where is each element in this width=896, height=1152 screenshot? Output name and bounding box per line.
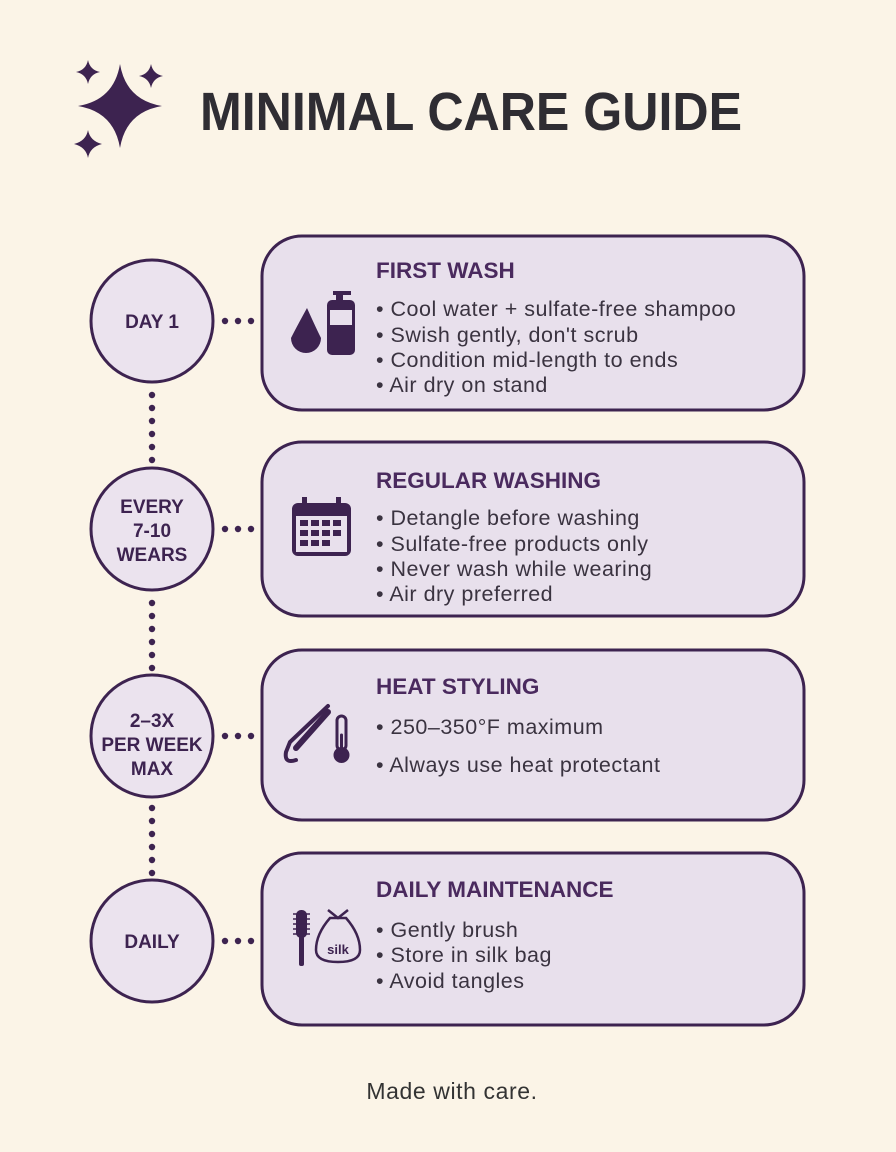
circle: every 7-10 wears: EVERY xyxy=(120,497,184,518)
circle: 2-3x per week xyxy=(91,675,213,797)
circle: 2-3x per week: 2–3X xyxy=(130,711,175,732)
panel: first wash: • Air dry on stand xyxy=(376,373,548,397)
footer: Made with care. xyxy=(366,1078,538,1104)
icon: brush and silk bag: silk xyxy=(327,942,350,957)
panel: regular washing: REGULAR WASHING xyxy=(376,468,601,493)
icon: drop and bottle xyxy=(291,291,355,355)
panel: first wash: FIRST WASH xyxy=(376,258,515,283)
panel: daily maintenance xyxy=(262,853,804,1025)
panel: heat styling: HEAT STYLING xyxy=(376,674,539,699)
icon: flat iron and thermometer xyxy=(286,706,348,762)
panel: regular washing: • Air dry preferred xyxy=(376,582,553,606)
icon: calendar xyxy=(292,497,351,556)
panel: daily maintenance: • Store in silk bag xyxy=(376,943,552,967)
panel: heat styling: • 250–350°F maximum xyxy=(376,715,604,739)
circle: every 7-10 wears: WEARS xyxy=(117,545,187,566)
panel: daily maintenance: DAILY MAINTENANCE xyxy=(376,877,614,902)
panel: first wash: • Condition mid-length to ends xyxy=(376,348,678,372)
circle: daily: DAILY xyxy=(124,932,180,953)
panel: daily maintenance: • Gently brush xyxy=(376,918,518,942)
circle: every 7-10 wears xyxy=(91,468,213,590)
panel: first wash: • Swish gently, don't scrub xyxy=(376,323,639,347)
panel: regular washing: • Detangle before washing xyxy=(376,506,640,530)
circle: daily xyxy=(91,880,213,1002)
panel: heat styling xyxy=(262,650,804,820)
panel: regular washing xyxy=(262,442,804,616)
circle: day 1 xyxy=(91,260,213,382)
panel: regular washing: • Never wash while wearing xyxy=(376,557,652,581)
circle: every 7-10 wears: 7-10 xyxy=(133,521,171,542)
circle: 2-3x per week: PER WEEK xyxy=(101,735,203,756)
panel: regular washing: • Sulfate-free products only xyxy=(376,532,648,556)
circle: day 1: DAY 1 xyxy=(125,312,179,333)
circle: 2-3x per week: MAX xyxy=(131,759,173,780)
panel: daily maintenance: • Avoid tangles xyxy=(376,969,525,993)
title: MINIMAL CARE GUIDE xyxy=(200,82,742,142)
icon: brush and silk bag xyxy=(293,910,360,966)
panel: heat styling: • Always use heat protectant xyxy=(376,753,660,777)
timeline connectors xyxy=(149,318,254,944)
panel: first wash: • Cool water + sulfate-free shampoo xyxy=(376,297,736,321)
panel: first wash xyxy=(262,236,804,410)
icon: sparkles xyxy=(74,60,163,158)
